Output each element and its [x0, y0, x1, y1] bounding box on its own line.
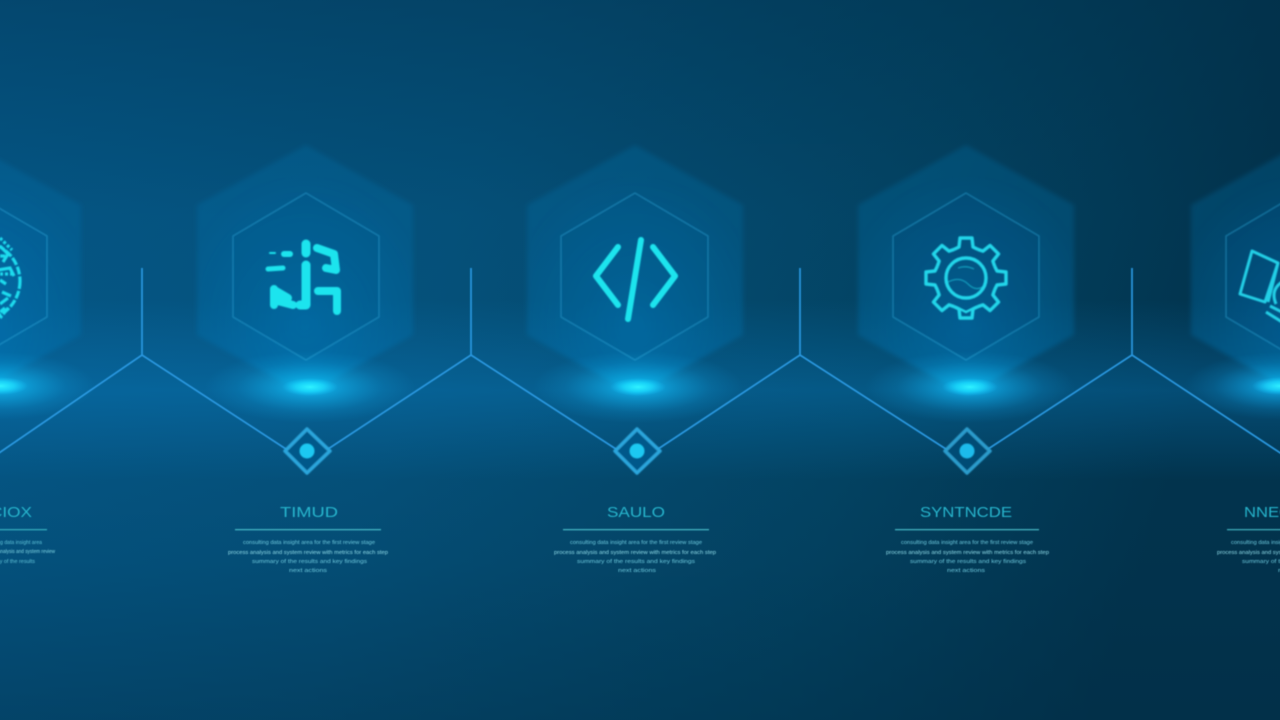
heading: step 3 title: SAULO	[607, 504, 665, 521]
text block: step 2: consulting data insight area for the first review stage	[243, 540, 375, 546]
text block: step 3: summary of the results and key findings	[577, 559, 696, 565]
icon: diamond node 4	[945, 429, 990, 473]
panel: step 2 hexagon	[197, 145, 413, 395]
icon: circuit globe	[0, 238, 20, 320]
icon: document and tools	[1240, 251, 1280, 322]
panel: step 1 hexagon, cropped at left edge	[0, 145, 81, 395]
text block: step 3: process analysis and system review with metrics for each step	[554, 550, 716, 556]
icon: gear	[926, 238, 1006, 318]
text block: step 5, cropped at right edge	[1217, 504, 1280, 574]
icon: fragmented blocks	[268, 244, 337, 311]
heading: step 2 title: TIMUD	[280, 504, 338, 521]
text block: step 4: consulting data insight area for the first review stage	[901, 540, 1033, 546]
text block: step 4	[886, 504, 1049, 574]
icon: diamond node 3	[615, 429, 660, 473]
text block: step 2: summary of the results and key findings	[252, 559, 368, 565]
heading: step 4 title: SYNTNCDE	[920, 504, 1012, 521]
panel: step 3 hexagon	[527, 145, 743, 395]
text block: step 2	[228, 504, 388, 574]
panel: step 4 hexagon	[858, 145, 1074, 395]
text block: step 2: next actions	[289, 568, 328, 574]
text block: step 4: next actions	[947, 568, 986, 574]
text block: step 4: process analysis and system review with metrics for each step	[886, 550, 1049, 556]
text block: step 4: summary of the results and key findings	[910, 559, 1027, 565]
text block: step 3	[554, 504, 716, 574]
icon: diamond node 2	[285, 429, 330, 473]
text block: step 3: consulting data insight area for the first review stage	[570, 540, 702, 546]
text block: step 3: next actions	[618, 568, 657, 574]
panel: step 5 hexagon, cropped at right edge	[1191, 145, 1280, 395]
text block: step 2: process analysis and system review with metrics for each step	[228, 550, 388, 556]
text block: step 1	[0, 504, 55, 565]
icon: code brackets	[596, 240, 675, 319]
glow: flares under hexagons	[0, 351, 1280, 423]
chart: zigzag connector line	[0, 268, 1280, 466]
